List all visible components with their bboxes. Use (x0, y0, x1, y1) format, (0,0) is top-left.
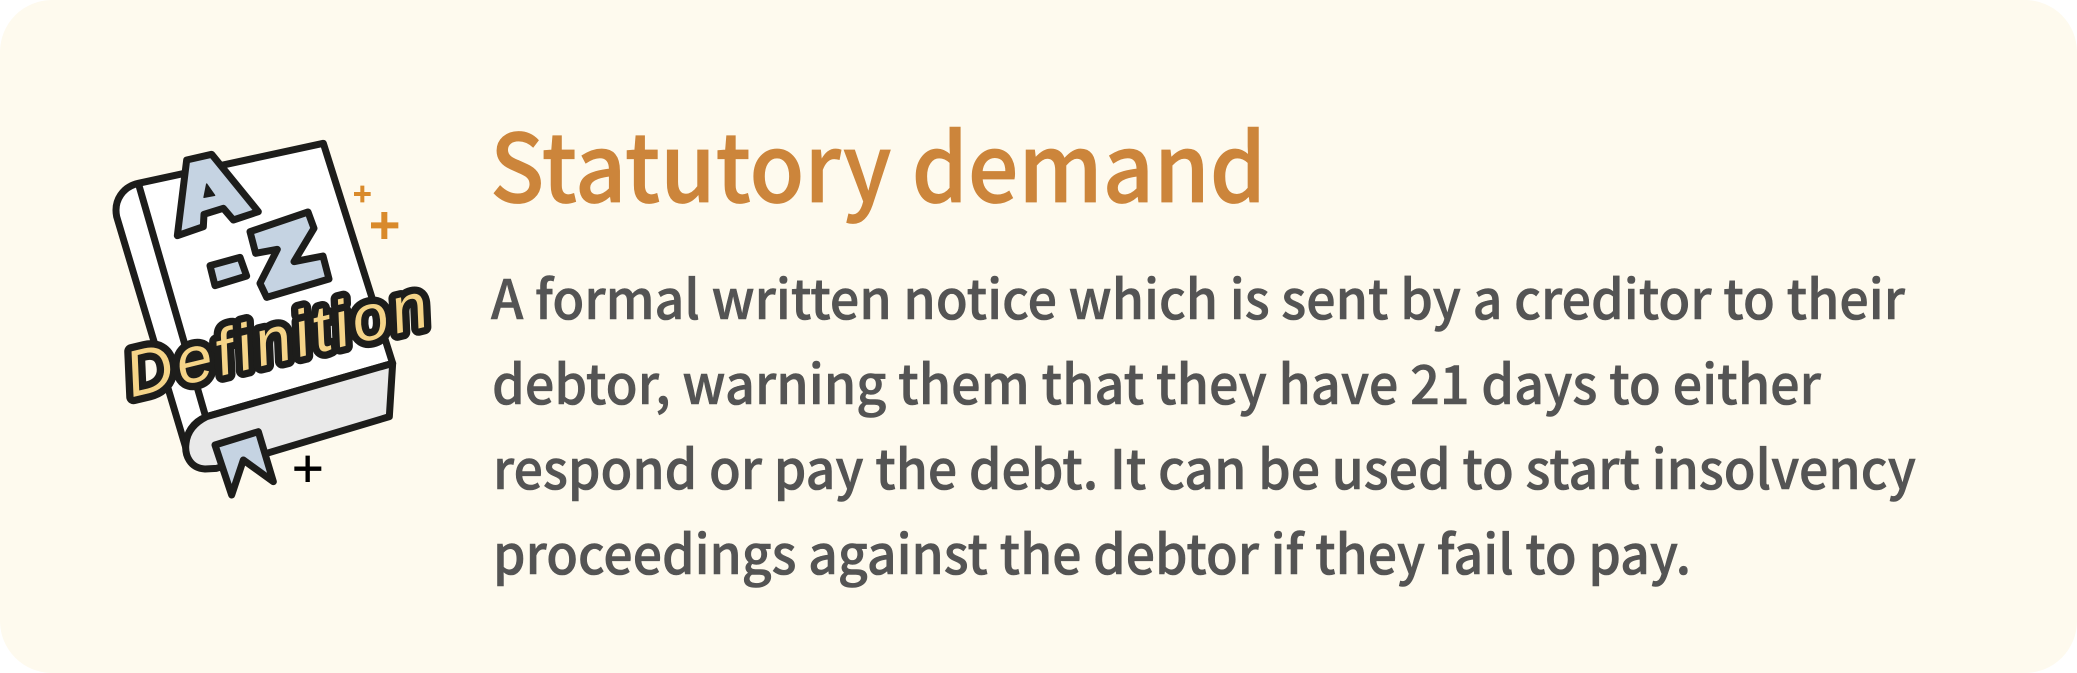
line 3: respond or pay the debt. It can be used to start insolvency (493, 426, 1916, 505)
letter Z (250, 212, 329, 297)
title: Statutory demand (490, 94, 1266, 230)
letter A (177, 154, 258, 236)
definition text (491, 256, 1916, 590)
book cover (116, 143, 393, 448)
sparkle: large orange plus (371, 212, 398, 239)
book spine line (138, 183, 206, 417)
sparkle: small orange plus (354, 186, 371, 202)
book pages (186, 363, 393, 469)
sparkle: black plus (294, 456, 321, 482)
bookmark (215, 432, 273, 495)
line 1: A formal written notice which is sent by a creditor to their (491, 256, 1906, 335)
dash (210, 257, 247, 286)
banner word: Definition: Definition (118, 268, 435, 411)
letter A counter (204, 184, 215, 197)
icon: definition book (116, 143, 435, 495)
line 2: debtor, warning them that they have 21 days to either (492, 341, 1822, 420)
line 4: proceedings against the debtor if they fail to pay. (493, 511, 1691, 590)
